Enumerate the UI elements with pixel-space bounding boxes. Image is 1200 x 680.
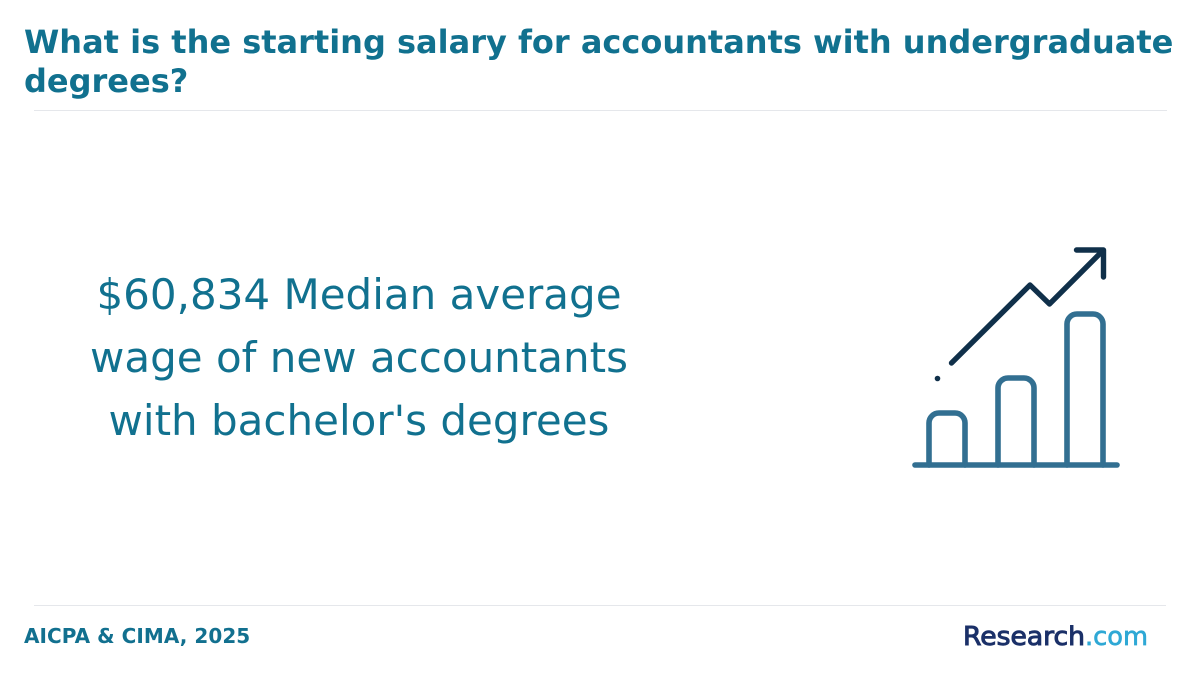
main statistic text: $60,834 Median average [96,270,622,319]
source: AICPA & CIMA, 2025 [24,624,250,648]
main statistic text: with bachelor's degrees [109,396,609,445]
title: What is the starting salary for accountants with undergraduate [24,23,1173,61]
main statistic text [90,270,628,445]
main statistic text: wage of new accountants [90,333,628,382]
icon: rising bar chart with arrow [912,247,1120,468]
logo: Research.com [963,622,1148,652]
logo: Research.com: .com [1085,622,1148,652]
title [24,23,1173,100]
title: degrees? [24,62,188,100]
logo: Research.com: Research [963,622,1085,652]
